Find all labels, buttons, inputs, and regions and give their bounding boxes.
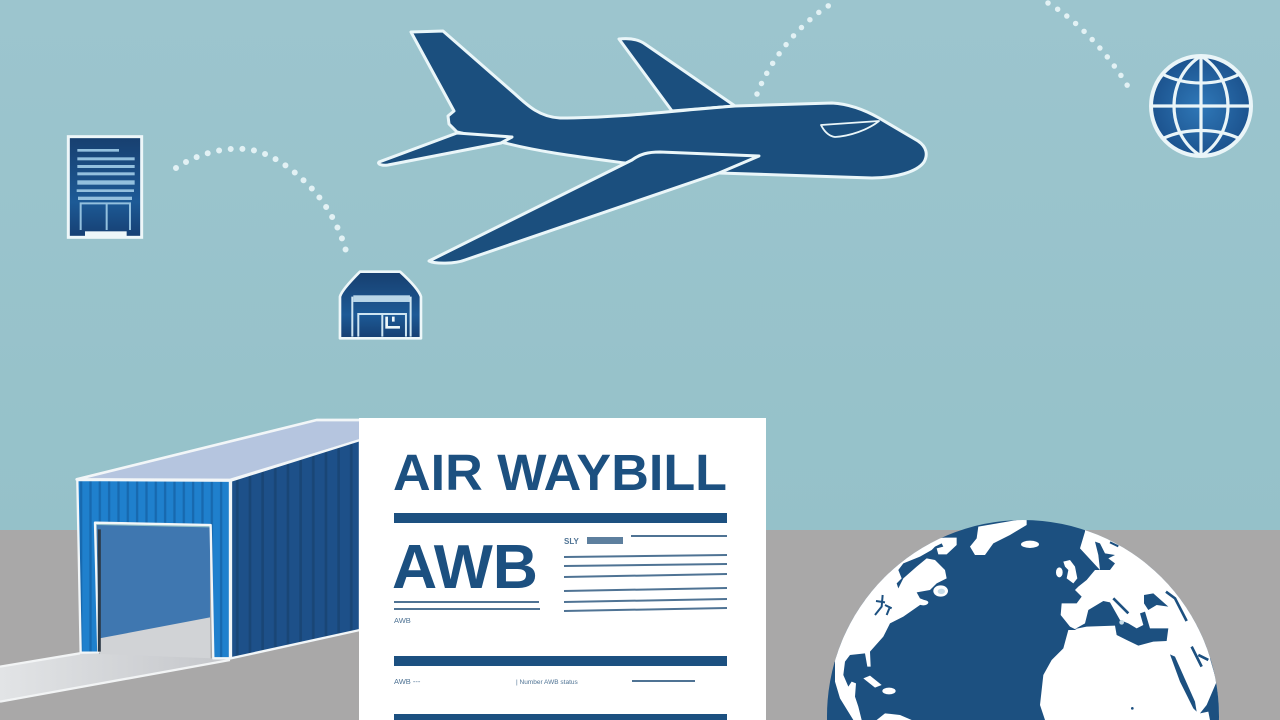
small label left: AWB xyxy=(394,616,411,625)
iceland xyxy=(1021,541,1039,548)
caribbean island xyxy=(882,688,896,694)
ruled lines left xyxy=(394,601,540,610)
cockpit window xyxy=(821,121,879,137)
south america xyxy=(877,713,912,720)
ramp xyxy=(0,653,230,702)
background ground xyxy=(0,530,1280,720)
ramp edges xyxy=(0,653,230,702)
europe africa and asia xyxy=(1021,530,1219,720)
lake chad dot xyxy=(1131,707,1134,710)
document sheet xyxy=(359,418,766,720)
heading: air waybill: AIR WAYBILL xyxy=(393,444,727,501)
icon: hangar xyxy=(340,272,421,338)
caspian xyxy=(1166,592,1187,621)
bar xyxy=(394,656,727,666)
bar xyxy=(394,513,727,523)
airplane xyxy=(379,31,926,263)
small text row middle: | Number AWB status xyxy=(516,679,579,686)
heading: awb: AWB xyxy=(392,533,538,602)
lake island xyxy=(933,585,948,597)
front wall xyxy=(77,480,230,658)
fuselage xyxy=(411,31,926,178)
dotted route: top to globe icon xyxy=(1048,3,1130,90)
north america xyxy=(827,538,957,720)
eurafrica landmass xyxy=(1040,530,1219,720)
black sea xyxy=(1144,593,1168,610)
near wing xyxy=(429,152,759,263)
small label bar xyxy=(587,537,623,544)
dotted route: plane to top xyxy=(757,3,833,94)
bar xyxy=(394,714,727,720)
ruled lines right xyxy=(564,536,727,611)
side wall xyxy=(231,440,360,658)
mediterranean xyxy=(1075,601,1168,646)
warehouse with loading ramp xyxy=(0,420,362,702)
background sky xyxy=(0,0,1280,532)
britain xyxy=(1063,560,1077,583)
small label top: SLY xyxy=(564,537,579,546)
great lakes xyxy=(875,595,892,615)
coastal island xyxy=(920,600,928,606)
far wing xyxy=(619,39,735,111)
small text row: AWB --- xyxy=(394,677,421,686)
white sea xyxy=(1110,542,1118,546)
tail stabilizer xyxy=(379,133,512,165)
lake centre xyxy=(938,589,945,594)
roof xyxy=(77,420,362,480)
world globe xyxy=(827,518,1250,720)
ireland xyxy=(1056,567,1063,577)
icon: globe xyxy=(1151,56,1251,156)
icon: warehouse building xyxy=(68,137,142,237)
adriatic xyxy=(1113,598,1128,613)
persian gulf xyxy=(1192,647,1208,667)
door frame shadow xyxy=(95,529,104,652)
sardinia xyxy=(1119,620,1124,625)
globe sphere xyxy=(827,520,1219,720)
door floor xyxy=(100,617,211,660)
line xyxy=(632,680,695,682)
indian ocean xyxy=(1200,658,1219,720)
air waybill document xyxy=(359,418,766,720)
caribbean island xyxy=(863,676,882,688)
red sea xyxy=(1170,654,1197,712)
door opening xyxy=(97,525,210,650)
greenland xyxy=(970,518,1027,555)
americas and greenland xyxy=(827,518,1027,720)
dotted route: warehouse to hangar xyxy=(176,149,348,260)
baltic sea xyxy=(1095,542,1115,570)
continents xyxy=(827,518,1250,720)
